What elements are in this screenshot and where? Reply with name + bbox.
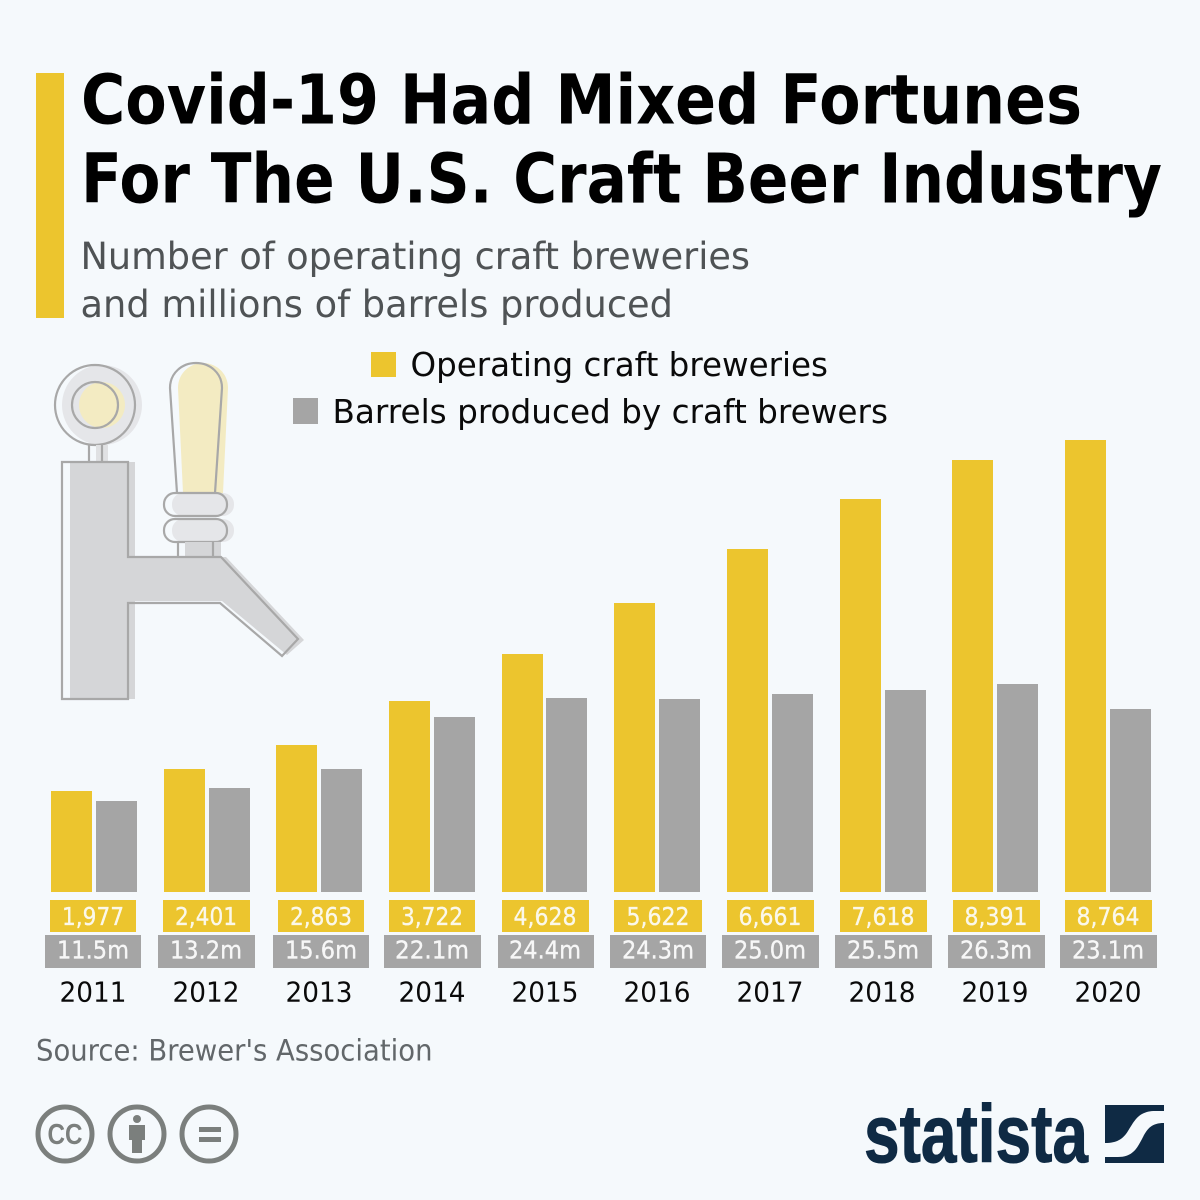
data labels: 2019: 26.3m <box>960 936 1032 964</box>
legend: Operating craft breweries <box>410 345 828 384</box>
data labels: 2017: 25.0m <box>734 936 806 964</box>
icon: creative commons <box>38 1107 92 1161</box>
data labels: 2016: 24.3m <box>622 936 694 964</box>
subtitle: Number of operating craft breweries <box>80 235 750 278</box>
data labels: 2018: 7,618 <box>852 902 914 931</box>
bars: 2014 <box>389 701 475 892</box>
icon: beer tap <box>55 363 304 699</box>
data labels: 2019: 8,391 <box>964 902 1028 931</box>
bars: 2016 <box>614 603 700 892</box>
data labels: 2012: 13.2m <box>170 936 242 964</box>
legend <box>293 345 888 431</box>
subtitle <box>80 235 750 326</box>
statista logo mark <box>1105 1105 1164 1163</box>
data labels: 2017: 2017 <box>736 976 804 1008</box>
icon: creative commons: CC <box>48 1119 83 1151</box>
data labels: 2019: 2019 <box>962 976 1028 1008</box>
data labels: 2012: 2012 <box>172 976 240 1008</box>
data labels: 2013: 15.6m <box>285 936 357 964</box>
data labels: 2013: 2013 <box>286 976 352 1008</box>
icon: attribution <box>110 1107 164 1161</box>
data labels: 2011: 11.5m <box>57 936 129 964</box>
data labels: 2012 <box>158 900 255 1008</box>
data labels: 2011: 1,977 <box>62 902 124 931</box>
bars: 2019 <box>952 460 1038 892</box>
data labels: 2015: 24.4m <box>509 936 581 964</box>
data labels: 2020: 8,764 <box>1076 902 1140 931</box>
data labels: 2016 <box>610 900 706 1008</box>
data labels: 2011: 2011 <box>60 976 126 1008</box>
bars: 2018 <box>840 499 926 892</box>
data labels: 2018 <box>835 900 932 1008</box>
data labels: 2016: 2016 <box>624 976 690 1008</box>
accent bar <box>36 73 64 318</box>
legend: Barrels produced by craft brewers <box>332 392 888 431</box>
bars: 2015 <box>502 654 587 892</box>
data labels: 2014 <box>384 900 481 1008</box>
statista wordmark: statista <box>864 1089 1089 1180</box>
data labels: 2015: 2015 <box>512 976 578 1008</box>
data labels: 2017 <box>722 900 819 1008</box>
data labels: 2011 <box>45 900 141 1008</box>
data labels: 2013 <box>273 900 369 1008</box>
title <box>81 60 1162 220</box>
icon: no derivatives <box>182 1107 236 1161</box>
bar chart <box>51 440 1151 892</box>
data labels: 2016: 5,622 <box>626 902 690 931</box>
data labels: 2020: 2020 <box>1074 976 1142 1008</box>
bars: 2013 <box>276 745 362 892</box>
data labels: 2018: 2018 <box>848 976 916 1008</box>
data labels: 2014: 22.1m <box>395 936 469 964</box>
data labels: 2020: 23.1m <box>1072 936 1144 964</box>
data labels: 2015 <box>498 900 594 1008</box>
data labels: 2014: 2014 <box>398 976 466 1008</box>
title: Covid-19 Had Mixed Fortunes <box>81 60 1082 140</box>
bars: 2020 <box>1065 440 1151 892</box>
data labels: 2012: 2,401 <box>175 902 237 931</box>
data labels: 2019 <box>948 900 1045 1008</box>
data labels: 2013: 2,863 <box>290 902 352 931</box>
subtitle: and millions of barrels produced <box>80 283 673 326</box>
data labels: 2015: 4,628 <box>514 902 576 931</box>
data labels: 2020 <box>1060 900 1157 1008</box>
data labels: 2017: 6,661 <box>738 902 802 931</box>
data labels: 2018: 25.5m <box>847 936 919 964</box>
bars: 2012 <box>164 769 250 892</box>
data labels: 2014: 3,722 <box>401 902 463 931</box>
bars: 2017 <box>727 549 813 892</box>
source: Source: Brewer's Association <box>36 1034 432 1068</box>
bars: 2011 <box>51 791 137 892</box>
